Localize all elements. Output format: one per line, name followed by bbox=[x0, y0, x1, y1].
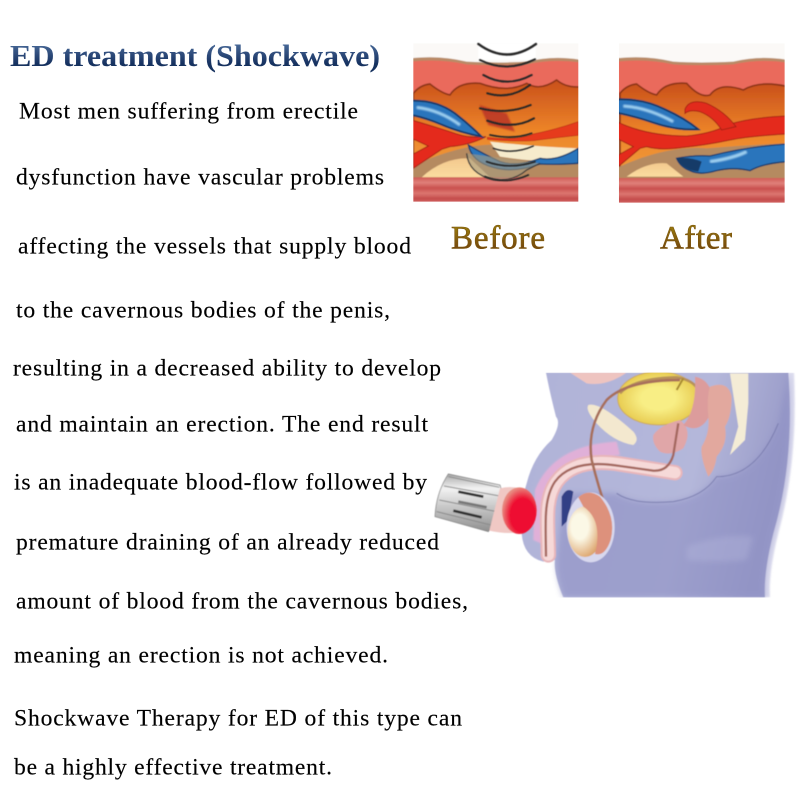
scrotum bbox=[562, 490, 573, 527]
body text: vascular explanation: meaning an erection is not achieved. bbox=[14, 642, 388, 668]
body text: vascular explanation: amount of blood from the cavernous bodies, bbox=[16, 588, 468, 614]
body text: vascular explanation: to the cavernous bodies of the penis, bbox=[16, 298, 390, 324]
body text: vascular explanation: is an inadequate blood-flow followed by bbox=[14, 470, 427, 496]
body text: conclusion: Shockwave Therapy for ED of this type can bbox=[14, 706, 462, 732]
bladder bbox=[618, 372, 699, 425]
body text: vascular explanation: dysfunction have vascular problems bbox=[16, 164, 384, 190]
label: after: After bbox=[660, 220, 732, 256]
title: ED treatment (Shockwave) bbox=[10, 38, 380, 73]
illustration: after treatment vessels bbox=[618, 56, 785, 203]
penis shaft bbox=[547, 462, 675, 555]
vas deferens bbox=[588, 378, 680, 498]
pelvic organs bbox=[570, 373, 627, 384]
body text: vascular explanation bbox=[13, 98, 468, 668]
body text: vascular explanation: Most men suffering from erectile bbox=[19, 98, 358, 124]
body text: vascular explanation: and maintain an erection. The end result bbox=[16, 412, 428, 438]
erectile tissue bbox=[533, 442, 620, 547]
prostate and glands bbox=[653, 420, 688, 454]
illustration: anatomy with shockwave applicator bbox=[435, 372, 795, 597]
body text: vascular explanation: affecting the vessels that supply blood bbox=[18, 234, 411, 260]
body cross-section bbox=[764, 372, 796, 598]
body text: conclusion bbox=[14, 706, 462, 780]
body text: vascular explanation: premature draining of an already reduced bbox=[16, 530, 439, 556]
shockwave arcs bbox=[478, 44, 536, 180]
label: before: Before bbox=[451, 220, 545, 256]
illustration: before treatment vessels bbox=[410, 40, 582, 207]
body text: conclusion: be a highly effective treatment. bbox=[14, 754, 332, 780]
shockwave applicator bbox=[435, 474, 537, 534]
rectum bbox=[701, 385, 732, 477]
body text: vascular explanation: resulting in a decreased ability to develop bbox=[13, 356, 441, 382]
